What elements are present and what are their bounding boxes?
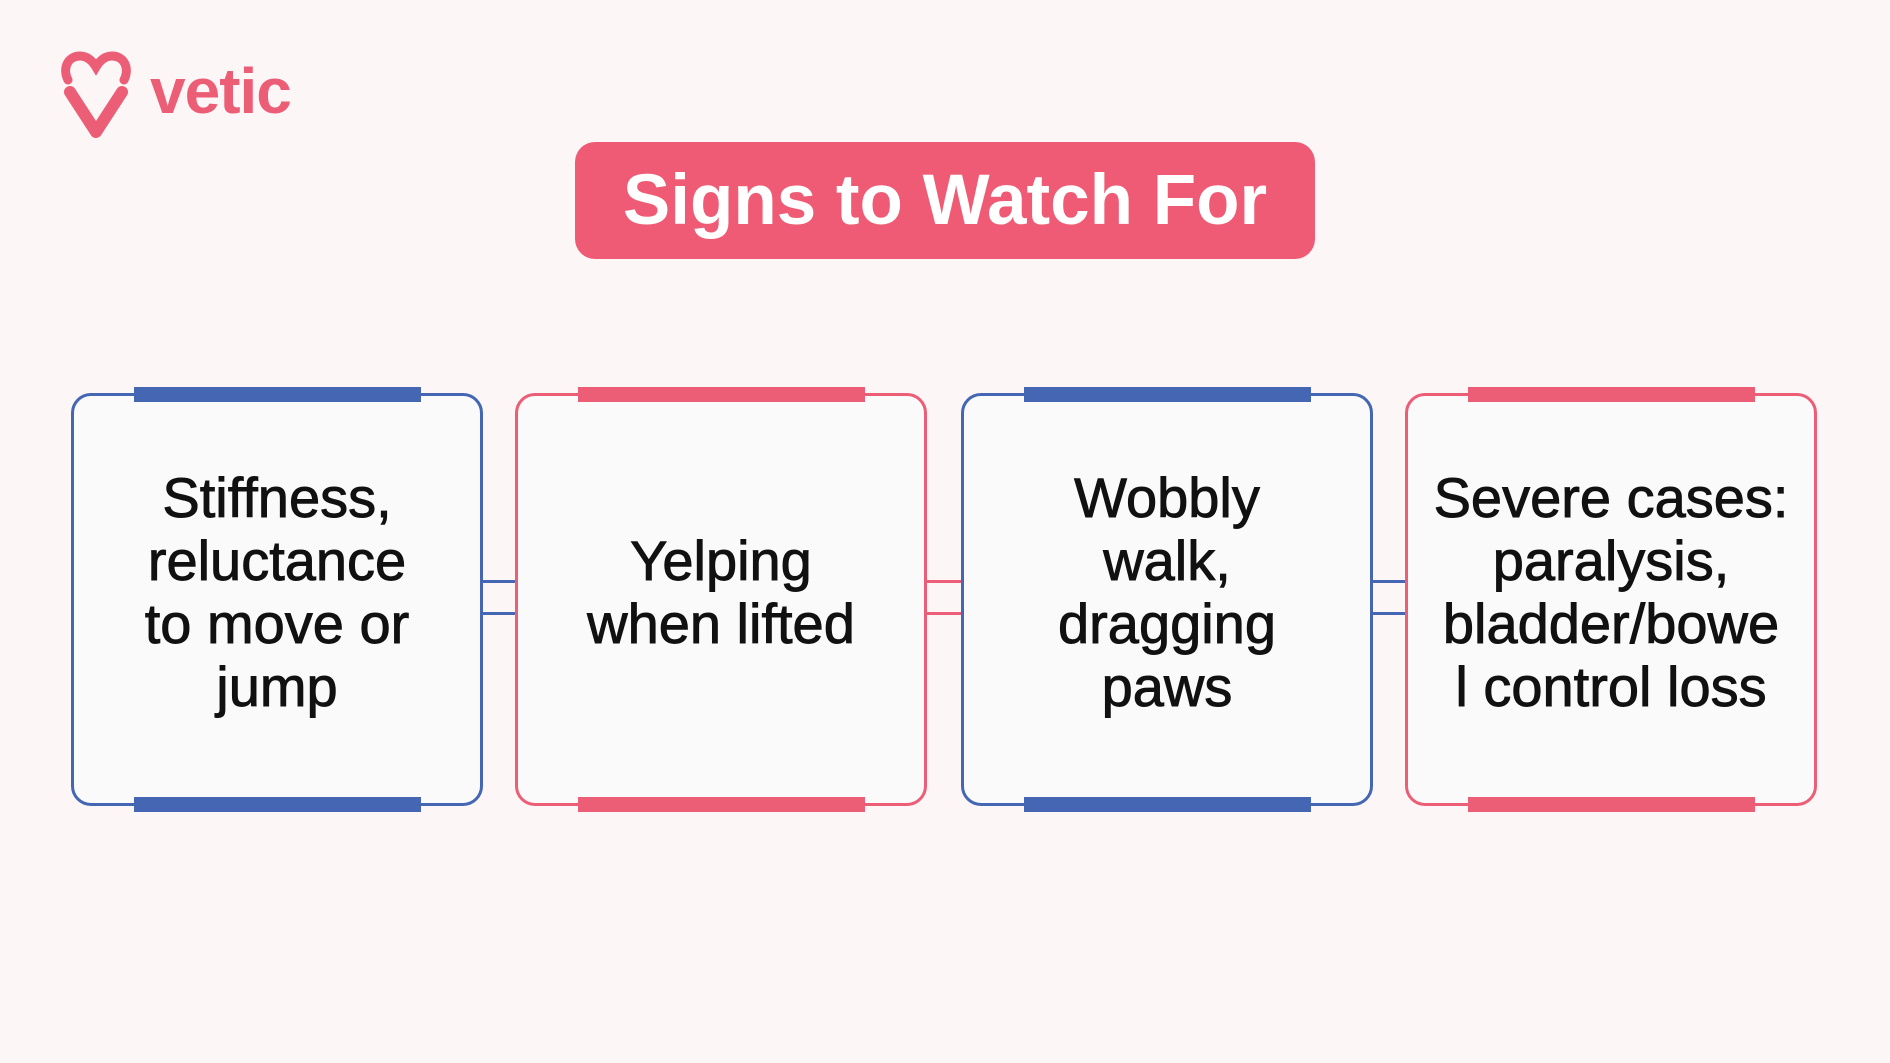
connector 2 [927,580,961,615]
panel: severe: Severe cases: [1434,466,1788,528]
panel: yelping [515,393,927,806]
panel: wobbly: paws [1102,654,1232,718]
panel: severe: l control loss [1455,654,1767,718]
logo text: vetic [150,55,291,127]
panel: severe: bladder/bowe [1443,592,1779,654]
panel: wobbly: Wobbly [1074,466,1260,528]
connector 1 [483,580,515,615]
panel: stiffness [71,393,483,806]
panel: stiffness: jump [216,654,338,718]
title [575,142,1315,259]
panel: yelping: when lifted [587,592,855,654]
panel: yelping: Yelping [630,528,812,592]
panel: wobbly: walk, [1103,528,1231,592]
title: Signs to Watch For [623,161,1267,240]
panel: stiffness: Stiffness, [162,466,392,528]
connector 3 [1373,580,1405,615]
panel: severe: paralysis, [1493,528,1729,592]
icon: heart v [61,52,131,138]
panel: wobbly [961,393,1373,806]
panel: stiffness: to move or [145,592,409,654]
panel: stiffness: reluctance [148,528,406,592]
logo [61,52,291,138]
panel: severe [1405,393,1817,806]
panel: wobbly: dragging [1058,592,1276,654]
